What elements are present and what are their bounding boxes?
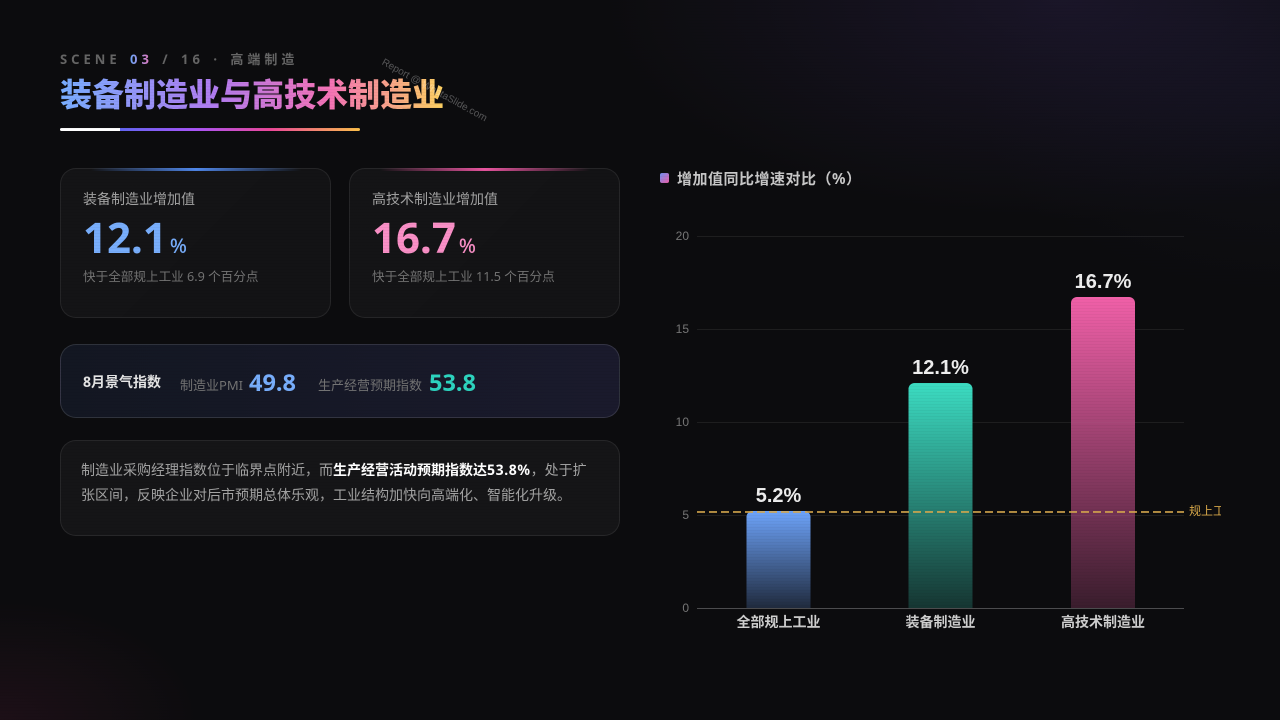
watermark: Report @ WhataSlide.com	[380, 57, 489, 124]
accent line: pink	[380, 168, 590, 171]
y axis labels: 10	[676, 415, 689, 429]
y axis labels	[676, 229, 689, 615]
y axis labels: 20	[676, 229, 689, 243]
panel: equipment manufacturing KPI	[60, 168, 331, 318]
bar: all industry 5.2: 5.2%	[756, 485, 802, 507]
bar: all industry 5.2	[746, 485, 810, 608]
KPI note: 快于全部规上工业 11.5 个百分点	[372, 268, 555, 285]
reference line label: 规上工业	[1189, 503, 1237, 518]
expectation label: 生产经营预期指数	[318, 376, 422, 394]
x axis labels: 全部规上工业	[736, 614, 820, 630]
title: 装备制造业与高技术制造业	[60, 73, 444, 116]
y axis labels: 15	[676, 322, 689, 336]
bar: equipment 12.1	[908, 357, 972, 608]
panel: August sentiment indexes	[60, 344, 620, 418]
y axis labels: 5	[682, 508, 689, 522]
expectation value: 53.8	[429, 366, 476, 398]
KPI note: 快于全部规上工业 6.9 个百分点	[83, 268, 258, 285]
bar: high-tech 16.7	[1071, 271, 1135, 608]
panel: commentary	[60, 440, 620, 536]
PMI label: 制造业PMI	[180, 376, 243, 394]
accent line: blue	[91, 168, 301, 171]
KPI label: 高技术制造业增加值	[372, 190, 498, 209]
title underline	[60, 128, 360, 131]
KPI value: 16.7%	[372, 209, 476, 266]
bar: high-tech 16.7: 16.7%	[1075, 271, 1132, 293]
x axis line	[697, 608, 1184, 610]
PMI value: 49.8	[249, 366, 296, 398]
icon: legend square	[660, 173, 669, 183]
commentary text: 制造业采购经理指数位于临界点附近，而生产经营活动预期指数达53.8%，处于扩张区间，反映企业对后市预期总体乐观，工业结构加快向高端化、智能化升级。	[81, 461, 587, 505]
grid lines	[697, 236, 1184, 516]
panel: high-tech manufacturing KPI	[349, 168, 620, 318]
panel heading: 8月景气指数	[83, 373, 161, 392]
bar: equipment 12.1: 12.1%	[912, 357, 969, 379]
eyebrow: scene number and section: SCENE 03 / 16 · 高端制造	[60, 50, 298, 68]
x axis labels: 高技术制造业	[1061, 614, 1145, 630]
reference line	[697, 511, 1184, 513]
x axis labels	[736, 614, 1145, 630]
chart heading	[660, 169, 862, 189]
y axis labels: 0	[682, 601, 689, 615]
x axis labels: 装备制造业	[906, 614, 976, 630]
bar chart: value-added growth	[676, 229, 1221, 630]
KPI value: 12.1%	[83, 209, 187, 266]
chart title: 增加值同比增速对比（%）	[677, 169, 862, 189]
KPI label: 装备制造业增加值	[83, 190, 195, 209]
